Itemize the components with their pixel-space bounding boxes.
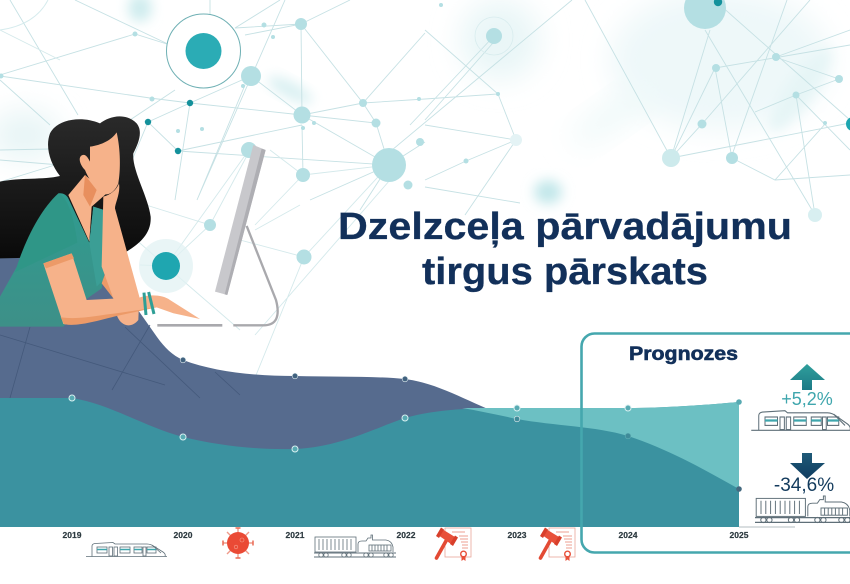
timeline years: 2022 bbox=[397, 530, 416, 540]
pale nodes bbox=[0, 0, 843, 264]
bracelets bbox=[144, 292, 154, 315]
area chart bbox=[0, 258, 795, 527]
icon: gavel and document 2023 bbox=[540, 528, 575, 561]
hair bbox=[0, 116, 151, 258]
network of connected nodes bbox=[0, 0, 850, 390]
dark nodes bbox=[145, 0, 722, 154]
timeline years: 2025 bbox=[730, 530, 749, 540]
timeline years: 2020 bbox=[174, 530, 193, 540]
edge teal node bbox=[846, 117, 850, 131]
large ring node bbox=[166, 14, 240, 88]
timeline years bbox=[63, 530, 749, 540]
freight decline value: -34,6% bbox=[774, 475, 834, 496]
icon: down arrow bbox=[790, 453, 825, 479]
blanket fold lines bbox=[0, 325, 240, 398]
neck and chest bbox=[68, 175, 107, 242]
face bbox=[80, 132, 120, 194]
passenger growth value: +5,2% bbox=[781, 389, 833, 409]
icon: freight train bbox=[755, 496, 850, 523]
icon: timeline freight train bbox=[314, 535, 396, 557]
timeline years: 2023 bbox=[508, 530, 527, 540]
panel: forecasts bbox=[582, 334, 850, 552]
forecast heading: Prognozes bbox=[629, 344, 738, 365]
title: Dzelzceļa pārvadājumu bbox=[338, 206, 792, 248]
icon: timeline passenger train bbox=[86, 542, 167, 556]
teal series markers bbox=[69, 395, 742, 452]
timeline years: 2021 bbox=[286, 530, 305, 540]
icon: up arrow bbox=[790, 364, 825, 390]
network lines bbox=[0, 0, 850, 390]
icon: gavel and document 2022 bbox=[436, 528, 471, 561]
blue series markers bbox=[180, 357, 742, 492]
inner elbow shadow bbox=[102, 260, 113, 298]
supporting arm bbox=[102, 183, 139, 325]
panel: lower-left teal node bbox=[139, 239, 193, 293]
woman at computer bbox=[0, 116, 278, 327]
typing arm bbox=[43, 253, 200, 325]
timeline years: 2019 bbox=[63, 530, 82, 540]
halo rings around node bbox=[475, 17, 513, 55]
blue area: road freight bbox=[0, 258, 739, 527]
light forecast wedge bbox=[462, 402, 739, 489]
background haze bbox=[0, 0, 840, 204]
monitor bbox=[157, 145, 278, 325]
teal area: passenger transport bbox=[0, 398, 739, 527]
icon: coronavirus bbox=[223, 528, 253, 558]
timeline years: 2024 bbox=[619, 530, 638, 540]
shirt bbox=[0, 193, 110, 327]
icon: passenger train bbox=[751, 411, 850, 430]
title: tirgus pārskats bbox=[422, 251, 708, 293]
title bbox=[338, 206, 792, 293]
